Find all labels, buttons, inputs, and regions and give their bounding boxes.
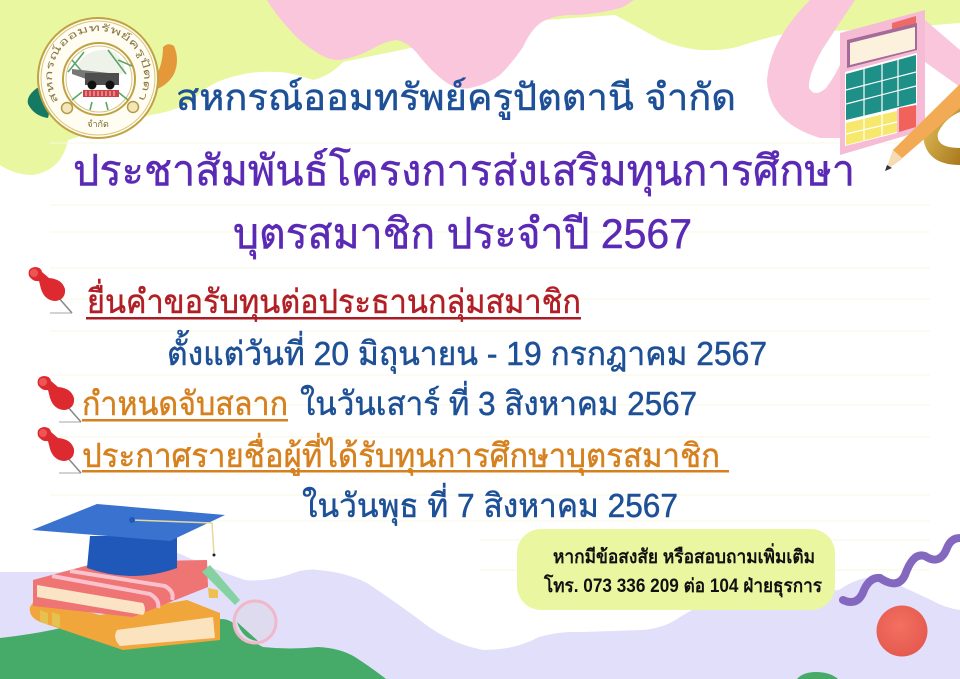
orange book (30, 598, 220, 650)
title (73, 77, 855, 260)
icon: purple squiggle (843, 538, 960, 602)
underline (82, 419, 288, 422)
cap (87, 536, 177, 576)
item: announcement date (38, 427, 729, 526)
underline (86, 317, 581, 320)
seal orange arc (150, 44, 177, 90)
red book (33, 560, 208, 617)
icon: red pin (29, 267, 72, 313)
ruled paper lines (50, 143, 930, 570)
announcement date: ในวันพุธ ที่ 7 สิงหาคม 2567 (302, 483, 678, 526)
tassel (208, 588, 218, 598)
background blob: lime top (0, 0, 960, 175)
announcement heading: ประกาศรายชื่อผู้ที่ได้รับทุนการศึกษาบุตรสมาชิก (82, 433, 720, 476)
icon: red pin (38, 376, 81, 422)
application dates: ตั้งแต่วันที่ 20 มิถุนายน - 19 กรกฎาคม 2567 (167, 330, 767, 374)
background wave: lavender bottom (0, 553, 960, 679)
item: application period (29, 267, 767, 374)
draw date: ในวันเสาร์ ที่ 3 สิงหาคม 2567 (300, 381, 697, 422)
icon: red pin (38, 427, 81, 473)
item: draw date (38, 376, 697, 422)
seal: cooperative logo (28, 17, 177, 139)
background blob: pink ribbon behind calculator (767, 0, 855, 138)
contact callout (517, 529, 835, 610)
magnifier (234, 601, 276, 643)
icon: coral ball (876, 606, 928, 656)
seal green leaf (28, 88, 54, 118)
contact line 1: หากมีข้อสงสัย หรือสอบถามเพิ่มเติม (553, 543, 815, 568)
heading: organisation name: สหกรณ์ออมทรัพย์ครูปัตตานี จำกัด (176, 77, 736, 120)
draw heading: กำหนดจับสลาก (82, 385, 288, 422)
background wave: green mound right (797, 672, 838, 679)
contact line 2: โทร. 073 336 209 ต่อ 104 ฝ่ายธุรการ (543, 574, 823, 598)
background blob: pink top (267, 0, 634, 88)
icon: calculator with pencil (840, 10, 960, 171)
application heading: ยื่นคำขอรับทุนต่อประธานกลุ่มสมาชิก (87, 279, 581, 322)
seal bottom text: จำกัด (87, 119, 109, 129)
heading: project announcement: ประชาสัมพันธ์โครงการส่งเสริมทุนการศึกษา (73, 146, 855, 197)
icon: graduation cap on books (30, 504, 276, 650)
background wave: green bottom (0, 615, 386, 679)
underline (82, 470, 729, 472)
heading: year line: บุตรสมาชิก ประจำปี 2567 (233, 210, 692, 260)
